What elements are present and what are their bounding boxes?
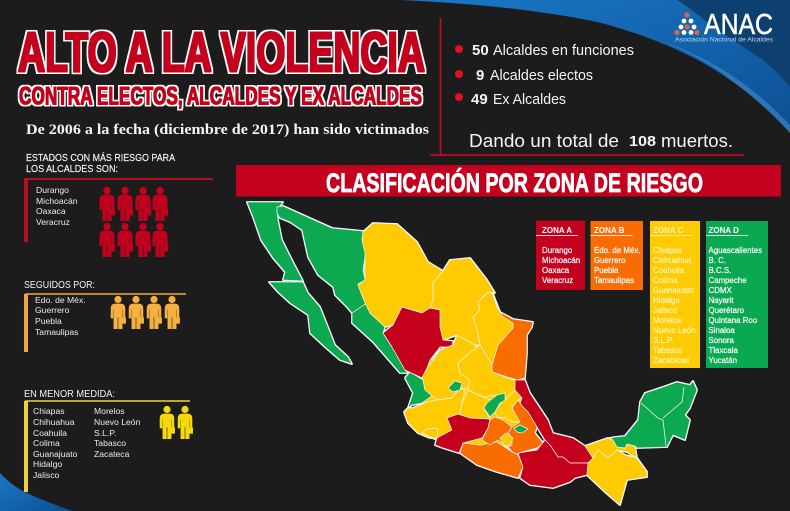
- list: first column: Guanajuato: [33, 449, 78, 459]
- list: first column: Chiapas: [33, 406, 65, 416]
- bullet: 49 former mayors: 49: [471, 91, 488, 108]
- state: Colima yellow: [422, 428, 438, 439]
- map of Mexico by risk zone: [247, 202, 697, 505]
- list: first column: Colima: [33, 438, 60, 448]
- list: second column: [94, 406, 141, 459]
- state group: north yellow: [358, 223, 513, 365]
- legend: zone B: Edo. de Méx.: [594, 246, 640, 255]
- legend: zone C: [650, 221, 700, 368]
- list: second column: S.L.P.: [94, 428, 116, 438]
- list: second column: Nuevo León: [94, 417, 141, 427]
- list: followed by: [35, 295, 86, 337]
- state: Aguascalientes green: [448, 381, 462, 392]
- state: Morelos yellow: [500, 433, 513, 446]
- legend: zone C: Hidalgo: [653, 296, 680, 305]
- legend: zone A: Oaxaca: [542, 266, 570, 275]
- legend: zone B: Tamaulipas: [594, 276, 634, 285]
- legend: zone B: ZONA B: [594, 226, 625, 235]
- legend: zone D: Sinaloa: [708, 326, 735, 335]
- state: Veracruz and Oaxaca red: [515, 380, 593, 488]
- heading: to a lesser extent: EN MENOR MEDIDA:: [24, 388, 115, 400]
- list: top risk states: [36, 185, 78, 227]
- bullet: 9 mayors elect: 9: [476, 67, 484, 84]
- heading: top risk states: [26, 151, 175, 175]
- list: first column: Coahuila: [33, 428, 67, 438]
- panel: to a lesser extent: [24, 388, 193, 492]
- bullet: 49 former mayors: Ex Alcaldes: [493, 92, 566, 108]
- legend: zone D: Tlaxcala: [708, 346, 738, 355]
- legend: zone D: Quintana Roo: [708, 316, 758, 325]
- intro sentence: De 2006 a la fecha (diciembre de 2017) han sido victimados: [26, 122, 429, 138]
- icons: eight red people: [100, 187, 168, 257]
- total: 108: [629, 133, 656, 150]
- central underlay closing gaps: [420, 347, 522, 450]
- list: followed by: Edo. de Méx.: [35, 295, 86, 305]
- list: followed by: Guerrero: [35, 305, 70, 315]
- legend: zone C: Coahuila: [653, 266, 685, 275]
- legend: zone D: Sonora: [708, 336, 735, 345]
- state: Durango red: [383, 307, 453, 378]
- total: muertos.: [661, 130, 733, 151]
- heading: top risk states: LOS ALCALDES SON:: [26, 164, 118, 175]
- state: Tlaxcala green: [514, 425, 528, 433]
- legend: zone D: ZONA D: [708, 226, 739, 235]
- bullet: 9 mayors elect: Alcaldes electos: [490, 68, 593, 84]
- list: top risk states: Michoacán: [36, 196, 78, 206]
- heading: followed by: SEGUIDOS POR:: [24, 279, 95, 291]
- legend: zone D: Yucatán: [708, 356, 737, 365]
- bullet: 9 mayors elect: [455, 67, 593, 84]
- legend: zone C: Morelos: [653, 316, 681, 325]
- list: followed by: Puebla: [35, 316, 62, 326]
- legend: zone D: CDMX: [708, 286, 732, 295]
- legend: zone B: [590, 221, 643, 290]
- state group: Yucatán peninsula green: [610, 381, 697, 448]
- list: second column: Zacateca: [94, 449, 130, 459]
- legend: zone D: [706, 221, 768, 368]
- legend: zone D: Campeche: [708, 276, 747, 285]
- state: Querétaro green: [484, 393, 505, 417]
- legend: zone D: Aguascalientes: [708, 246, 762, 255]
- icons: four orange people: [111, 296, 180, 329]
- panel: victim counts: [455, 42, 733, 151]
- state group: central yellow: [404, 335, 522, 438]
- list: first column: Hidalgo: [33, 459, 62, 469]
- legend: zone C: S.L.P.: [653, 336, 673, 345]
- panel: top risk states: [24, 151, 213, 257]
- panel: followed by: [24, 279, 186, 352]
- total: [469, 130, 733, 151]
- legend: zone C: Guanajuato: [653, 286, 694, 295]
- legend: zone D: B.C.S.: [708, 266, 731, 275]
- legend: zone C: Tabasco: [653, 346, 683, 355]
- legend: zone A: Durango: [542, 246, 573, 255]
- logo tagline: Asociación Nacional de Alcaldes: [675, 36, 774, 44]
- legend: zone C: Jalisco: [653, 306, 678, 315]
- logo wordmark: ANAC: [704, 9, 773, 41]
- red bracket: [26, 179, 213, 242]
- legend: zone B: Puebla: [594, 266, 619, 275]
- legend: zone A: ZONA A: [542, 226, 572, 235]
- list: top risk states: Durango: [36, 185, 69, 195]
- state group: north-west green: [247, 202, 433, 408]
- legend: zone C: ZONA C: [653, 226, 684, 235]
- title: ALTO A LA VIOLENCIA: [18, 20, 425, 84]
- state: Tamaulipas orange: [492, 294, 533, 380]
- title: [18, 20, 425, 110]
- state group: south-east yellow: [585, 438, 647, 505]
- legend: zone C: Chiapas: [653, 246, 682, 255]
- red divider frame: [430, 18, 744, 155]
- list: first column: Jalisco: [33, 470, 59, 480]
- legend: zone B: Guerrero: [594, 256, 626, 265]
- logo icon: dot triangle: [674, 12, 700, 35]
- list: top risk states: Oaxaca: [36, 206, 66, 216]
- background: top-right blue swoosh: [400, 0, 790, 133]
- subtitle: CONTRA ELECTOS, ALCALDES Y EX ALCALDES: [19, 82, 422, 110]
- state: Michoacán red: [435, 414, 490, 453]
- list: second column: Morelos: [94, 406, 125, 416]
- state group: central orange: [460, 400, 543, 478]
- list: followed by: Tamaulipas: [35, 327, 78, 337]
- legend: zone A: Veracruz: [542, 276, 573, 285]
- yellow bracket: [26, 401, 190, 492]
- list: second column: Tabasco: [94, 438, 126, 448]
- logo: ANAC: [674, 9, 774, 44]
- legend: zone C: Zacatecas: [653, 356, 689, 365]
- icons: two yellow people: [160, 406, 193, 439]
- legend: zone A: Michoacán: [542, 256, 580, 265]
- legend: zone A: [536, 220, 585, 290]
- heading: top risk states: ESTADOS CON MÁS RIESGO PARA: [26, 151, 175, 164]
- bullet: 49 former mayors: [455, 91, 566, 108]
- bullet: 50 mayors in office: 50: [472, 42, 489, 59]
- bullet: 50 mayors in office: Alcaldes en funciones: [493, 43, 634, 59]
- total: Dando un total de: [469, 130, 619, 151]
- legend: zone C: Colima: [653, 276, 678, 285]
- list: top risk states: Veracruz: [36, 217, 70, 227]
- list: first column: [33, 406, 78, 480]
- list: first column: Chihuahua: [33, 417, 75, 427]
- legend: zone D: Querétaro: [708, 306, 745, 315]
- legend: zone D: Nayarit: [708, 296, 734, 305]
- legend: zone C: Nuevo León: [653, 326, 696, 335]
- legend: zone C: Chihuahua: [653, 256, 692, 265]
- legend: zone D: B. C.: [708, 256, 726, 265]
- orange bracket: [26, 294, 186, 352]
- background: bottom-left blue corner: [0, 473, 72, 511]
